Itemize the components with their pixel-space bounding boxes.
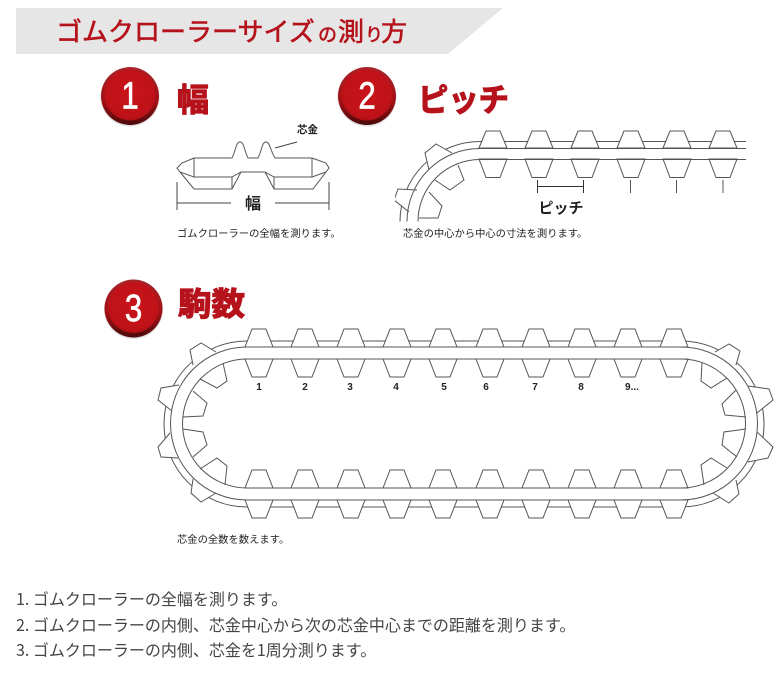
bottom outer lugs [245, 500, 688, 518]
inner teeth [435, 165, 464, 190]
label: core bar [275, 123, 318, 148]
badge 1: 1 [121, 76, 139, 117]
lug numbers: 6 [483, 382, 489, 393]
top outer lugs [245, 329, 688, 347]
caption: width: ゴムクローラーの全幅を測ります。 [177, 227, 341, 240]
title banner: り [365, 25, 383, 45]
lug numbers [256, 382, 639, 393]
lug numbers: 9... [625, 382, 639, 393]
title banner: 測 [338, 17, 364, 47]
width dimension: 幅 [245, 195, 261, 213]
lug numbers: 7 [532, 382, 538, 393]
lug numbers: 3 [347, 382, 353, 393]
label: pitch: ピッチ [538, 200, 584, 217]
width dimension [177, 182, 329, 213]
outer line [164, 341, 764, 507]
outer line and outer teeth [400, 142, 746, 222]
instructions list [16, 586, 575, 661]
lug numbers: 1 [256, 382, 262, 393]
lug numbers: 8 [578, 382, 584, 393]
bottom inner lugs [245, 470, 688, 488]
caption: count: 芯金の全数を数えます。 [177, 533, 289, 546]
title banner: ゴムクローラーサイズ [56, 17, 315, 47]
heading: width: 幅 [177, 82, 209, 118]
instructions list: 2. ゴムクローラーの内側、芯金中心から次の芯金中心までの距離を測ります。 [16, 612, 575, 636]
badge 3 [104, 280, 163, 339]
label: core bar: 芯金 [297, 123, 318, 136]
core bar lugs [232, 142, 275, 158]
instructions list: 3. ゴムクローラーの内側、芯金を1周分測ります。 [16, 637, 376, 661]
lug numbers: 2 [302, 382, 308, 393]
diagram: width cross-section [177, 123, 329, 213]
caption: pitch: 芯金の中心から中心の寸法を測ります。 [403, 227, 587, 240]
inner teeth [183, 363, 746, 485]
badge 3: 3 [125, 288, 142, 330]
top inner lugs [245, 359, 688, 377]
outer teeth [158, 343, 773, 503]
lug numbers: 4 [393, 382, 399, 393]
pitch bracket [538, 180, 584, 193]
badge 2 [338, 67, 396, 126]
title banner: 方 [381, 17, 407, 47]
instructions list: 1. ゴムクローラーの全幅を測ります。 [16, 586, 287, 610]
heading: pitch: ピッチ [418, 82, 509, 118]
belt lines [407, 148, 746, 222]
title banner [16, 8, 503, 54]
diagram: pitch [394, 131, 746, 222]
ticks [630, 180, 723, 193]
diagram: full crawler loop [158, 329, 773, 518]
title banner: の [318, 25, 337, 46]
heading: count: 駒数 [178, 286, 245, 322]
badge 1 [100, 67, 160, 126]
badge 2: 2 [358, 76, 376, 117]
crawler body outline [177, 158, 329, 189]
lugs [479, 131, 507, 148]
lug numbers: 5 [441, 382, 447, 393]
belt lines [170, 347, 758, 500]
